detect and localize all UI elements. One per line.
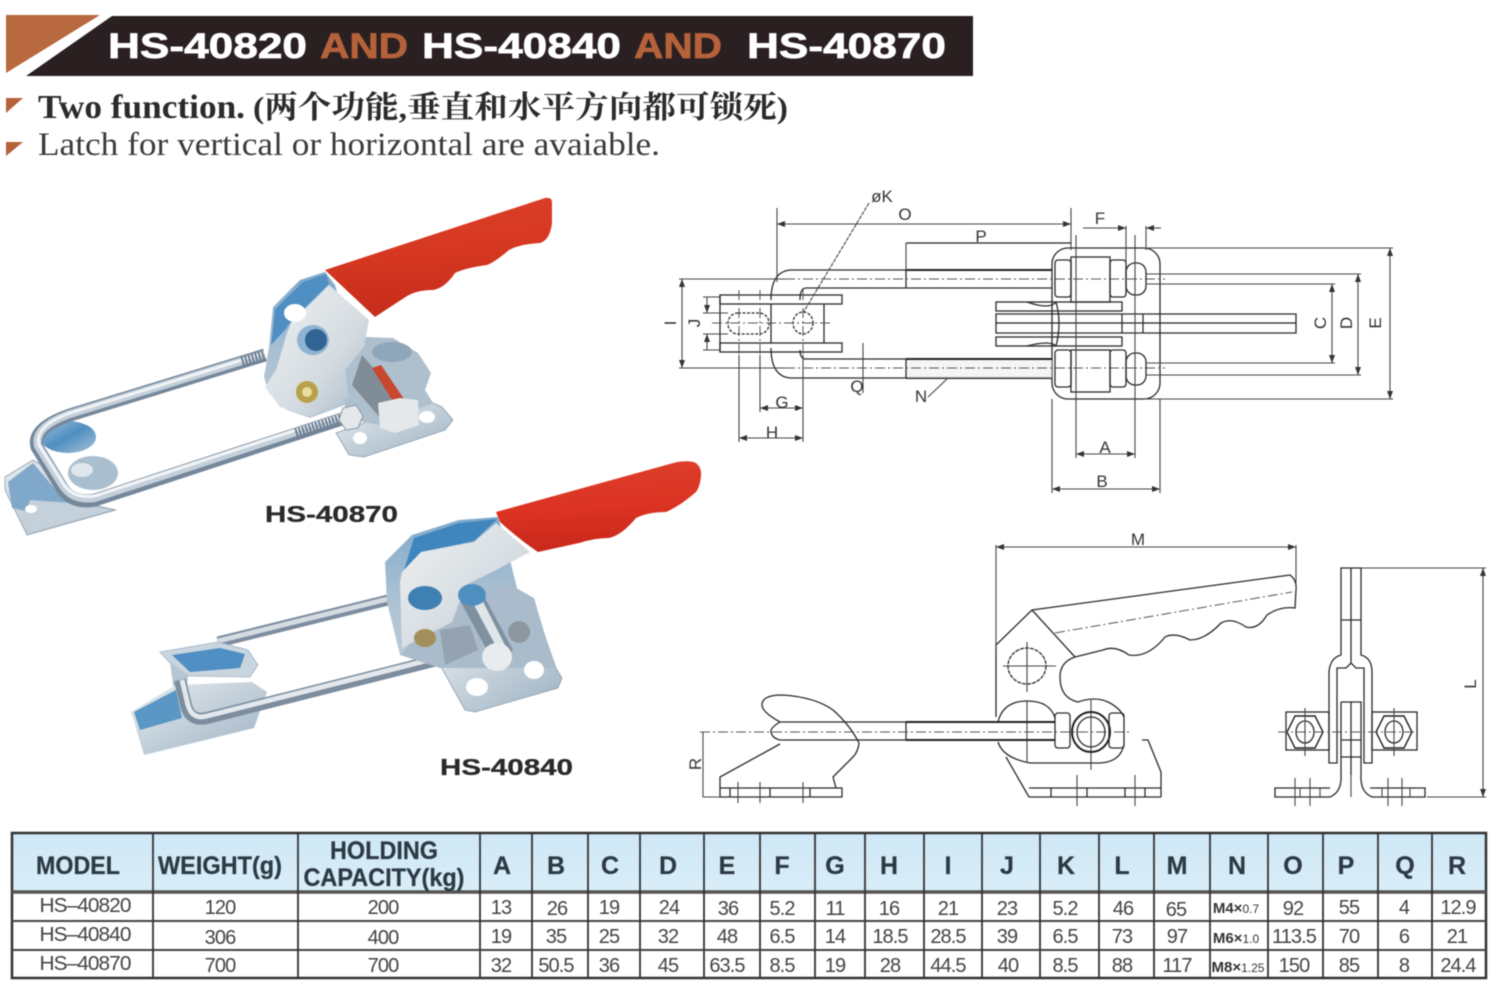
table row: HS-40840: HS–40840 — [40, 924, 131, 946]
table row: HS-40820: M4×0.7 — [1213, 900, 1259, 917]
dimension letters: B — [1096, 472, 1108, 491]
back plate — [385, 517, 520, 655]
table column headers: K — [1057, 852, 1075, 880]
base plate — [336, 403, 453, 457]
table row: HS-40840: 32 — [658, 926, 679, 948]
table row: HS-40820: 46 — [1113, 898, 1134, 920]
table row: HS-40840: 25 — [599, 926, 620, 948]
dimension M and R: M — [1131, 530, 1145, 549]
table row: HS-40870: 85 — [1339, 955, 1360, 977]
red handle — [496, 461, 701, 552]
product photo: HS-40840 clamp — [131, 461, 701, 755]
table grid — [12, 833, 1486, 978]
table row: HS-40820: 200 — [368, 897, 399, 919]
table row: HS-40820: 23 — [997, 898, 1018, 920]
table row: HS-40870: 63.5 — [709, 955, 745, 977]
table column headers: L — [1114, 852, 1130, 880]
table column headers: A — [493, 852, 511, 880]
table column headers: P — [1338, 852, 1354, 880]
hook roundels — [40, 421, 118, 490]
table column headers: D — [659, 852, 677, 880]
table row: HS-40840: 400 — [368, 927, 399, 949]
table row: HS-40840: 39 — [997, 926, 1018, 948]
table row: HS-40870: 8.5 — [1052, 955, 1078, 977]
dimension letters: F — [1095, 209, 1105, 228]
table row: HS-40820: 21 — [938, 898, 959, 920]
base foot — [1006, 740, 1161, 806]
left hook — [712, 290, 842, 355]
top nuts — [1055, 257, 1146, 302]
mechanism — [345, 337, 435, 444]
table row: HS-40870: 45 — [658, 955, 679, 977]
title banner: AND — [320, 27, 408, 66]
table column headers: J — [1000, 852, 1014, 880]
table column headers: H — [880, 852, 898, 880]
table row: HS-40820: HS–40820 — [40, 895, 131, 917]
dimension letters: D — [1337, 317, 1356, 329]
table row: HS-40820: 11 — [826, 898, 845, 920]
product photo: HS-40870 clamp — [5, 198, 552, 535]
table row: HS-40820: 120 — [205, 897, 236, 919]
dimension letters: E — [1366, 317, 1385, 329]
table column headers: CAPACITY(kg) — [304, 864, 464, 892]
table row: HS-40820: 24 — [659, 897, 680, 919]
table row: HS-40870: 700 — [205, 955, 236, 977]
back plate — [264, 272, 350, 418]
table row: HS-40840: 28.5 — [930, 926, 966, 948]
table column headers: R — [1448, 852, 1466, 880]
table row: HS-40820 — [40, 895, 1476, 921]
table row: HS-40840: 113.5 — [1272, 926, 1317, 948]
table row: HS-40820: 12.9 — [1440, 897, 1476, 919]
dimension letters — [661, 187, 1385, 491]
hook base — [131, 682, 267, 755]
title banner — [6, 15, 973, 76]
dimension letters: O — [898, 205, 912, 224]
U-bolt rods — [36, 353, 345, 501]
center stack — [996, 302, 1296, 346]
table column headers: HOLDING — [330, 837, 438, 865]
dimension letters: øK — [871, 187, 894, 206]
feature line: two function: (两个功能,垂直和水平方向都可锁死) — [253, 90, 788, 125]
mechanism — [400, 585, 556, 696]
hook base — [5, 460, 116, 535]
table column headers: WEIGHT(g) — [158, 852, 282, 880]
table row: HS-40870: 40 — [998, 955, 1019, 977]
dimension letters: P — [975, 227, 987, 246]
table row: HS-40820: 13 — [491, 897, 512, 919]
table row: HS-40820: 4 — [1399, 897, 1410, 919]
base plate — [440, 625, 562, 712]
technical drawing: top view — [661, 187, 1393, 493]
dimension M and R — [686, 530, 1296, 797]
table row: HS-40820: 19 — [599, 897, 620, 919]
label: HS-40840: HS-40840 — [440, 754, 573, 780]
bolt rod — [700, 722, 1132, 740]
hook link — [170, 662, 188, 700]
table row: HS-40870: 19 — [825, 955, 846, 977]
table row: HS-40870: 8 — [1399, 955, 1410, 977]
dimension L — [1361, 568, 1486, 797]
table row: HS-40870: M8×1.25 — [1212, 959, 1265, 976]
dimension letters: G — [775, 393, 789, 412]
lever holes and screw — [284, 304, 329, 403]
title banner: AND — [634, 27, 722, 66]
table row: HS-40820: 26 — [547, 898, 568, 920]
rods — [771, 270, 1165, 378]
table row: HS-40870: 28 — [880, 955, 901, 977]
table column headers: C — [601, 852, 619, 880]
table row: HS-40840: 70 — [1339, 926, 1360, 948]
table row: HS-40870: 150 — [1279, 955, 1310, 977]
table row: HS-40820: 36 — [718, 898, 739, 920]
table row: HS-40870: 700 — [368, 955, 399, 977]
table row: HS-40870: 24.4 — [1440, 955, 1476, 977]
blue inner strip — [404, 519, 497, 570]
dimension letters: J — [685, 319, 704, 327]
table column headers: E — [719, 852, 735, 880]
table row: HS-40870: 117 — [1162, 955, 1192, 977]
table row: HS-40840: 306 — [205, 927, 236, 949]
hook top — [160, 642, 258, 677]
specification table — [12, 833, 1486, 978]
technical drawing: side view — [686, 530, 1296, 806]
table row: HS-40870 — [40, 953, 1476, 977]
feature line: two function: Two function. — [38, 89, 245, 126]
dimension letters: I — [661, 321, 680, 325]
dimension letters: H — [766, 423, 778, 442]
table row: HS-40870: 8.5 — [769, 955, 795, 977]
table row: HS-40840 — [40, 924, 1468, 949]
table row: HS-40840: 19 — [491, 926, 512, 948]
table row: HS-40840: 21 — [1447, 926, 1468, 948]
feature line: latch: Latch for vertical or horizontal are avaiable. — [38, 127, 660, 163]
table column headers: F — [774, 852, 790, 880]
table row: HS-40840: M6×1.0 — [1213, 930, 1259, 947]
dimension letters: A — [1099, 438, 1111, 457]
table row: HS-40840: 6.5 — [1052, 926, 1078, 948]
table row: HS-40820: 92 — [1283, 898, 1304, 920]
table row: HS-40820: 65 — [1166, 899, 1187, 921]
dimension letters: Q — [850, 377, 864, 396]
table row: HS-40840: 48 — [717, 926, 738, 948]
front lever plate — [265, 285, 369, 417]
table row: HS-40840: 6.5 — [769, 926, 795, 948]
table row: HS-40870: 88 — [1112, 955, 1133, 977]
red handle — [325, 198, 552, 317]
table column headers: Q — [1395, 852, 1415, 880]
table column headers: O — [1283, 852, 1303, 880]
title banner: HS-40870 — [747, 27, 946, 66]
table row: HS-40840: 97 — [1167, 926, 1188, 948]
table row: HS-40870: 32 — [491, 955, 512, 977]
table row: HS-40870: 44.5 — [930, 955, 966, 977]
table row: HS-40820: 5.2 — [1052, 898, 1078, 920]
hook top blue — [172, 648, 245, 672]
feet — [1275, 775, 1425, 806]
dimension letters: N — [915, 387, 927, 406]
lower rod and loop — [180, 656, 445, 719]
dimension L: L — [1461, 679, 1480, 689]
dimension lines — [679, 203, 1393, 493]
bottom nuts — [1055, 350, 1146, 392]
table column headers: G — [825, 852, 845, 880]
label: HS-40870: HS-40870 — [265, 501, 398, 527]
handle and plate — [996, 575, 1296, 770]
title banner: HS-40820 — [108, 27, 307, 66]
title banner: HS-40840 — [422, 27, 621, 66]
lever holes and screw — [408, 584, 486, 647]
table column headers — [36, 837, 1466, 892]
rods — [218, 599, 388, 642]
table row: HS-40820: 55 — [1339, 897, 1360, 919]
base plate outline — [1052, 248, 1160, 399]
hex nuts — [1278, 708, 1418, 756]
table column headers: N — [1228, 852, 1246, 880]
table row: HS-40870: 50.5 — [538, 955, 574, 977]
table header background — [12, 833, 1486, 892]
table row: HS-40840: 18.5 — [872, 926, 908, 948]
table row: HS-40820: 5.2 — [769, 898, 795, 920]
dimension letters: C — [1311, 317, 1330, 329]
table row: HS-40840: 14 — [825, 926, 846, 948]
blue inner strip — [271, 274, 329, 345]
hook — [720, 695, 859, 803]
front lever — [400, 523, 530, 648]
table column headers: I — [945, 852, 951, 880]
table row: HS-40870: 36 — [599, 955, 620, 977]
table row: HS-40840: 35 — [546, 926, 567, 948]
nut plates — [1286, 712, 1417, 750]
feature line: two function — [6, 89, 788, 126]
table column headers: MODEL — [36, 852, 120, 880]
technical drawing: end view — [1275, 568, 1486, 806]
nuts — [1055, 712, 1124, 752]
table row: HS-40820: 16 — [879, 898, 900, 920]
table row: HS-40870: HS–40870 — [40, 953, 131, 975]
dimension M and R: R — [686, 758, 705, 770]
table column headers: B — [547, 852, 565, 880]
table column headers: M — [1167, 852, 1187, 880]
table row: HS-40840: 6 — [1399, 926, 1410, 948]
upright and fork — [1329, 568, 1372, 775]
table row: HS-40840: 73 — [1112, 926, 1133, 948]
hex nut — [339, 405, 363, 430]
